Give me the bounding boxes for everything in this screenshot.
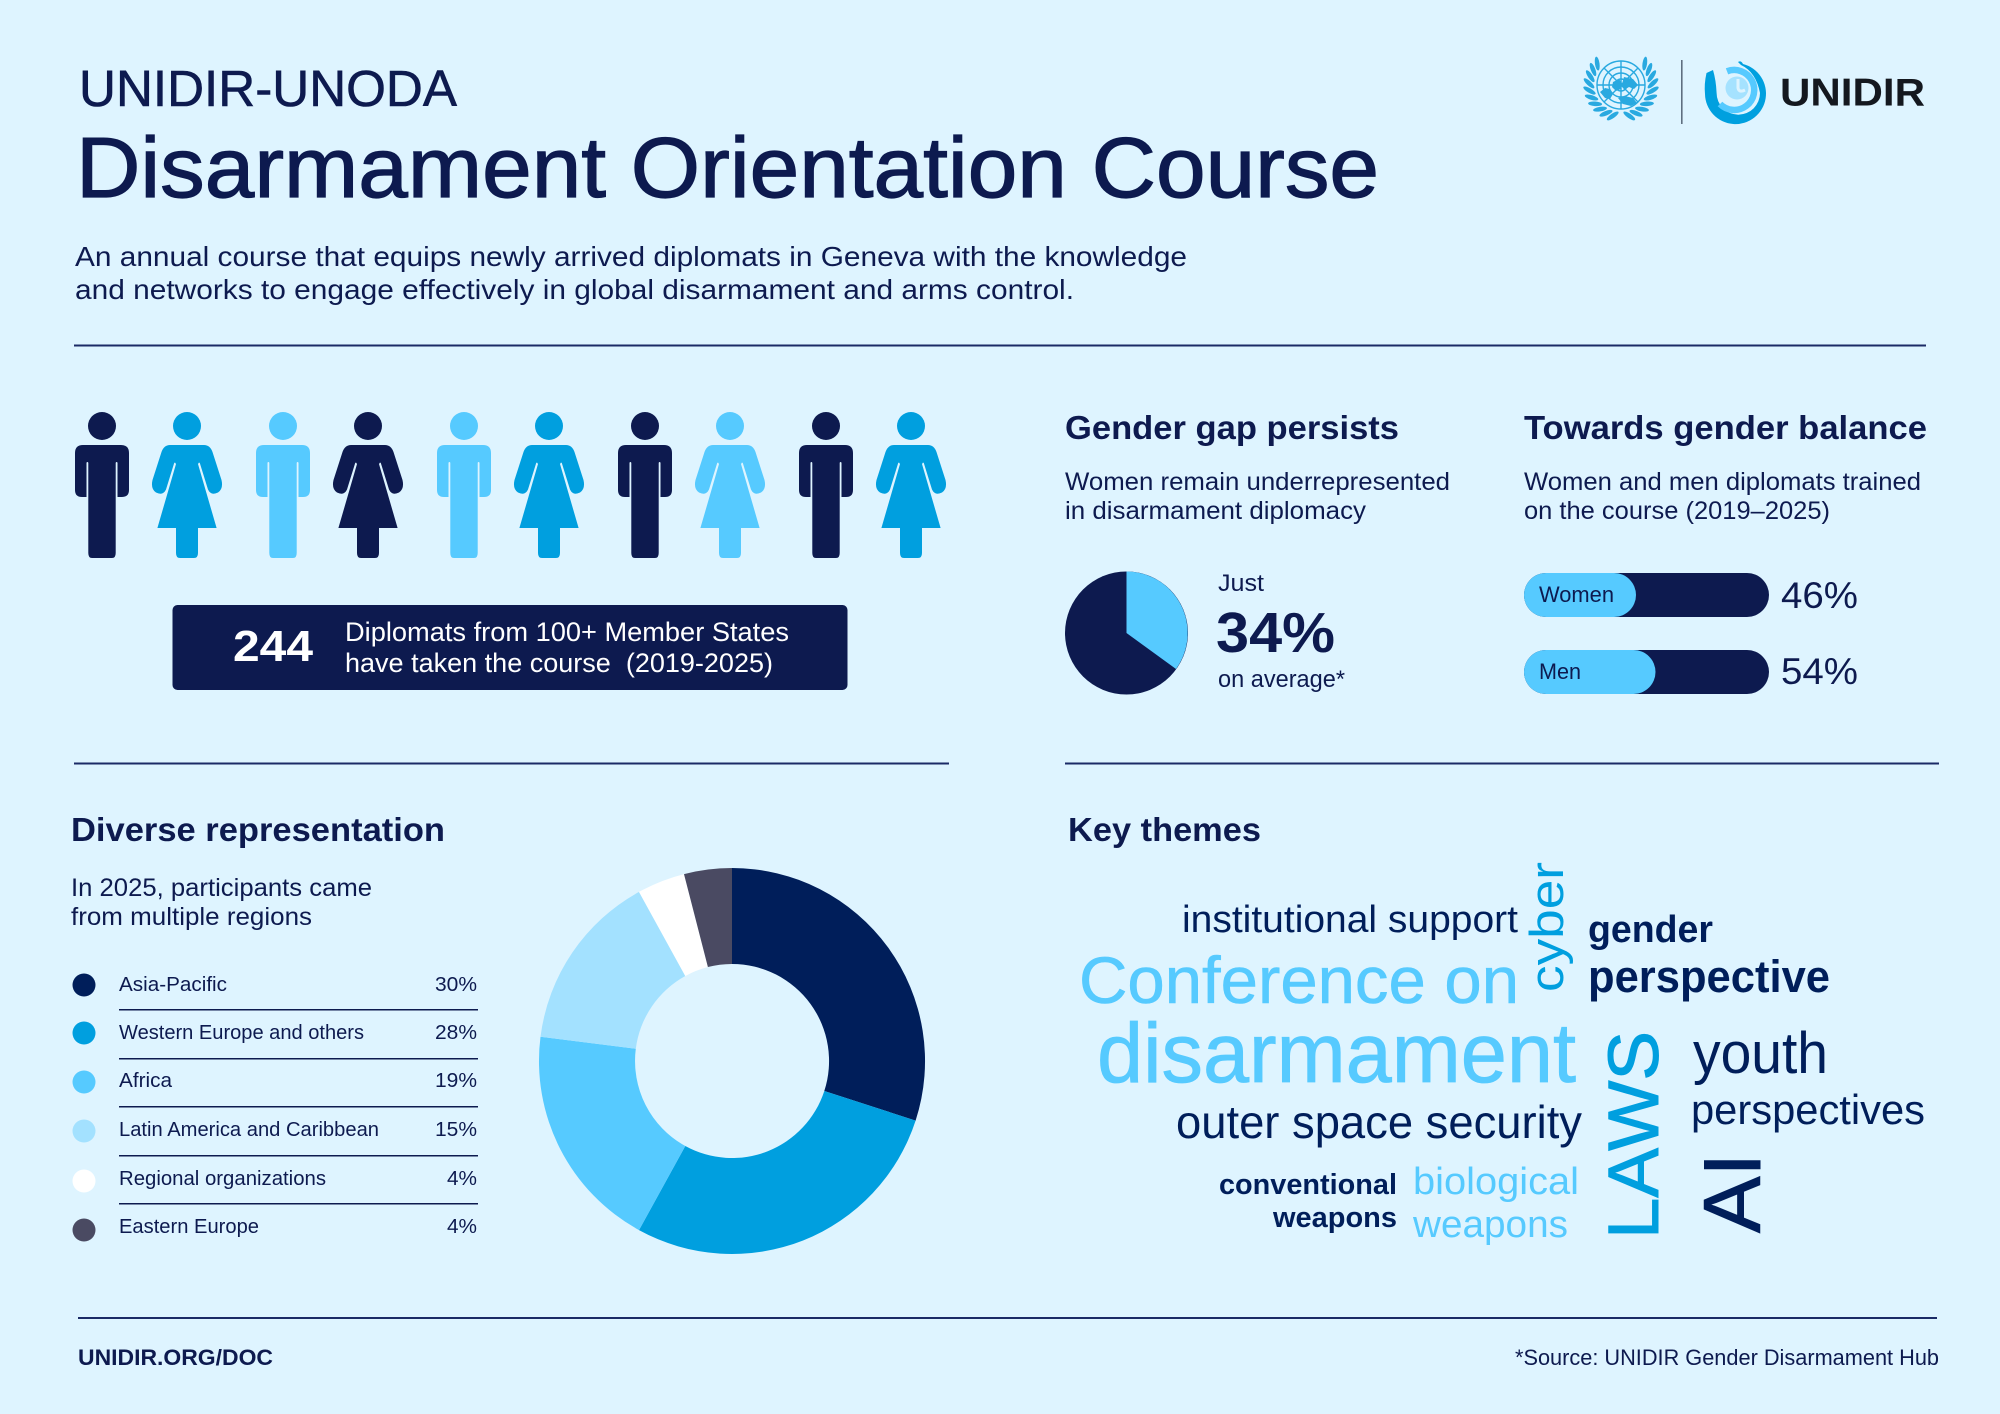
word cloud: conventional [1219, 1169, 1397, 1201]
word cloud: weapons [1412, 1204, 1568, 1246]
word cloud: perspective [1588, 951, 1830, 1002]
legend item: Eastern Europe: 4% [447, 1216, 477, 1238]
panel: diverse representation [71, 811, 925, 1254]
icon: man navy [618, 412, 672, 558]
footer [78, 1345, 1939, 1370]
icon: woman blue [514, 412, 584, 558]
stat: just 34% on average: 34% [1216, 601, 1335, 665]
icon: woman navy [333, 412, 403, 558]
heading: gender balance: Towards gender balance [1524, 409, 1927, 446]
intro text [75, 241, 1187, 305]
legend item: Western Europe: 28% [435, 1022, 477, 1044]
legend item: Latin America [72, 1119, 477, 1142]
legend item: Asia-Pacific: Asia-Pacific [119, 974, 227, 996]
icon: UN emblem [1582, 56, 1660, 122]
legend item: Africa: 19% [435, 1070, 477, 1092]
text: gender gap description: in disarmament diplomacy [1065, 497, 1367, 525]
bar: men 54%: Men [1539, 659, 1581, 684]
bar: men 54% [1524, 650, 1858, 694]
stat: just 34% on average [1216, 570, 1345, 693]
heading: gender gap: Gender gap persists [1065, 409, 1399, 446]
legend item: Africa [72, 1070, 477, 1094]
legend item: Latin America: Latin America and Caribbean [119, 1119, 379, 1141]
donut chart [539, 868, 925, 1254]
icon: man navy [75, 412, 129, 558]
text: gender balance description: on the course (2019–2025) [1524, 497, 1830, 525]
legend item: Western Europe: Western Europe and others [119, 1022, 364, 1044]
intro text: and networks to engage effectively in global disarmament and arms control. [75, 274, 1074, 305]
panel: gender gap [1065, 409, 1450, 694]
icon: woman light blue [695, 412, 765, 558]
legend item: Western Europe [72, 1022, 477, 1044]
heading: diverse representation: Diverse representation [71, 811, 445, 848]
bar: women 46% [1524, 573, 1858, 617]
panel: gender balance [1524, 409, 1927, 694]
word cloud: youth [1693, 1021, 1828, 1086]
word cloud: LAWS [1595, 1031, 1674, 1239]
word cloud: institutional support [1182, 899, 1518, 941]
icon: woman blue [152, 412, 222, 558]
legend item: Africa: Africa [119, 1070, 173, 1092]
word cloud: disarmament [1097, 1006, 1576, 1100]
pie chart: 34% women [1065, 572, 1188, 694]
text: gender gap description: Women remain underrepresented [1065, 468, 1450, 496]
legend item: Regional organizations [72, 1168, 477, 1192]
legend item: Asia-Pacific [72, 974, 477, 996]
footer link: UNIDIR.ORG/DOC [78, 1345, 273, 1370]
icon: man light blue [437, 412, 491, 558]
icon: man light blue [256, 412, 310, 558]
people icons row [75, 412, 946, 558]
logos [1582, 56, 1925, 124]
word cloud: AI [1688, 1153, 1778, 1233]
legend item: Asia-Pacific: 30% [435, 974, 477, 996]
legend [72, 974, 478, 1242]
icon: woman blue [876, 412, 946, 558]
word cloud: outer space security [1176, 1096, 1582, 1148]
text: gender balance description: Women and men diplomats trained [1524, 468, 1921, 496]
text: regions description [71, 874, 372, 931]
legend item: Eastern Europe [72, 1216, 477, 1242]
callout: 244 diplomats: 244 [233, 622, 314, 671]
panel: key themes [1068, 811, 1925, 1246]
callout: 244 diplomats [172, 605, 848, 690]
icon: man navy [799, 412, 853, 558]
logo wordmark: UNIDIR [1780, 72, 1925, 114]
word cloud: biological [1413, 1161, 1579, 1203]
text: regions description: from multiple regions [71, 903, 312, 931]
header [75, 60, 1379, 305]
word cloud: Conference on [1079, 943, 1519, 1017]
legend item: Eastern Europe: Eastern Europe [119, 1216, 259, 1238]
icon: UNIDIR swirl [1705, 61, 1766, 124]
text: gender balance description [1524, 468, 1921, 525]
legend item: Latin America: 15% [435, 1119, 477, 1141]
eyebrow title: UNIDIR-UNODA [79, 60, 457, 117]
word cloud: cyber [1520, 862, 1573, 992]
text: gender gap description [1065, 468, 1450, 525]
word cloud [1079, 862, 1925, 1246]
main title: Disarmament Orientation Course [76, 121, 1379, 216]
intro text: An annual course that equips newly arrived diplomats in Geneva with the knowledge [75, 241, 1187, 272]
word cloud: weapons [1272, 1202, 1397, 1234]
stat: just 34% on average: on average* [1218, 666, 1345, 693]
text: regions description: In 2025, participants came [71, 874, 372, 902]
stat: just 34% on average: Just [1218, 570, 1264, 597]
legend item: Regional organizations: 4% [447, 1168, 477, 1190]
bar: women 46%: Women [1539, 582, 1614, 607]
word cloud: perspectives [1691, 1086, 1925, 1133]
word cloud: gender [1588, 909, 1713, 951]
bar: men 54%: 54% [1781, 651, 1858, 692]
heading: key themes: Key themes [1068, 811, 1261, 848]
callout: 244 diplomats: Diplomats from 100+ Member States [345, 617, 789, 647]
bar: women 46%: 46% [1781, 575, 1858, 616]
source note: *Source: UNIDIR Gender Disarmament Hub [1515, 1345, 1939, 1370]
callout: 244 diplomats: have taken the course (2019-2025) [345, 648, 773, 678]
legend item: Regional organizations: Regional organizations [119, 1168, 326, 1190]
